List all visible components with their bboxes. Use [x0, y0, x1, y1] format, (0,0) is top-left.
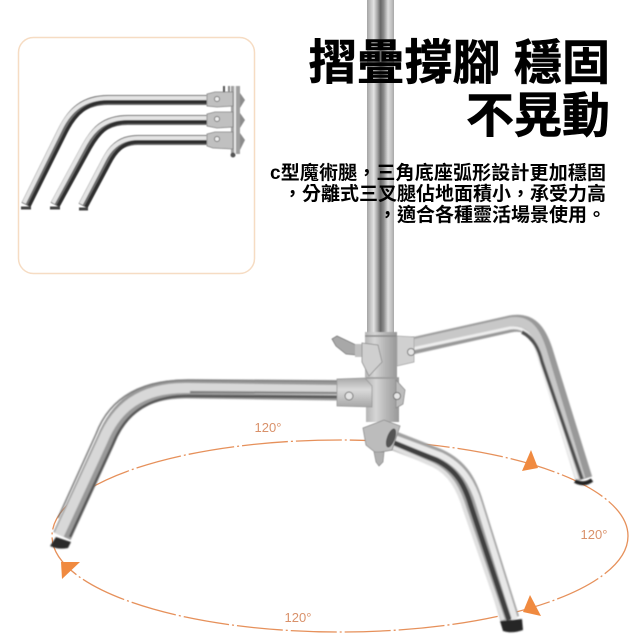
title: 不晃動 [466, 90, 610, 143]
leg: left [50, 380, 338, 549]
panel: folded legs inset [18, 38, 254, 274]
main body [366, 378, 399, 422]
knob: locking handle [332, 336, 366, 357]
upper collar [365, 332, 397, 380]
leg: rear right [412, 322, 592, 483]
label: 120 degrees right: 120° [581, 527, 607, 542]
bracket [362, 343, 382, 376]
title: 摺疊撐腳 穩固 [309, 37, 610, 90]
description text [270, 161, 606, 226]
arrow: right top [522, 450, 538, 471]
icon: inset hub [207, 86, 245, 158]
label: 120 degrees top: 120° [255, 420, 281, 435]
orange rotation ellipse [52, 440, 628, 632]
center pole [367, 0, 394, 336]
leg: front right [392, 437, 523, 632]
right leg socket [397, 336, 414, 366]
label: 120 degrees bottom: 120° [285, 610, 311, 625]
description text: c型魔術腿，三角底座弧形設計更加穩固 [270, 161, 606, 184]
arrow: right bottom [523, 595, 541, 616]
title [309, 37, 610, 143]
description text: ，適合各種靈活場景使用。 [378, 203, 606, 226]
bottom spike [374, 452, 384, 466]
lower clamp [363, 420, 400, 453]
left clamp [337, 378, 372, 407]
description text: ，分離式三叉腿佔地面積小，承受力高 [283, 182, 606, 205]
arrow: left [61, 562, 80, 579]
center hub assembly [332, 332, 414, 466]
right bolt [396, 380, 405, 408]
icon: three folded chrome legs [21, 98, 207, 209]
